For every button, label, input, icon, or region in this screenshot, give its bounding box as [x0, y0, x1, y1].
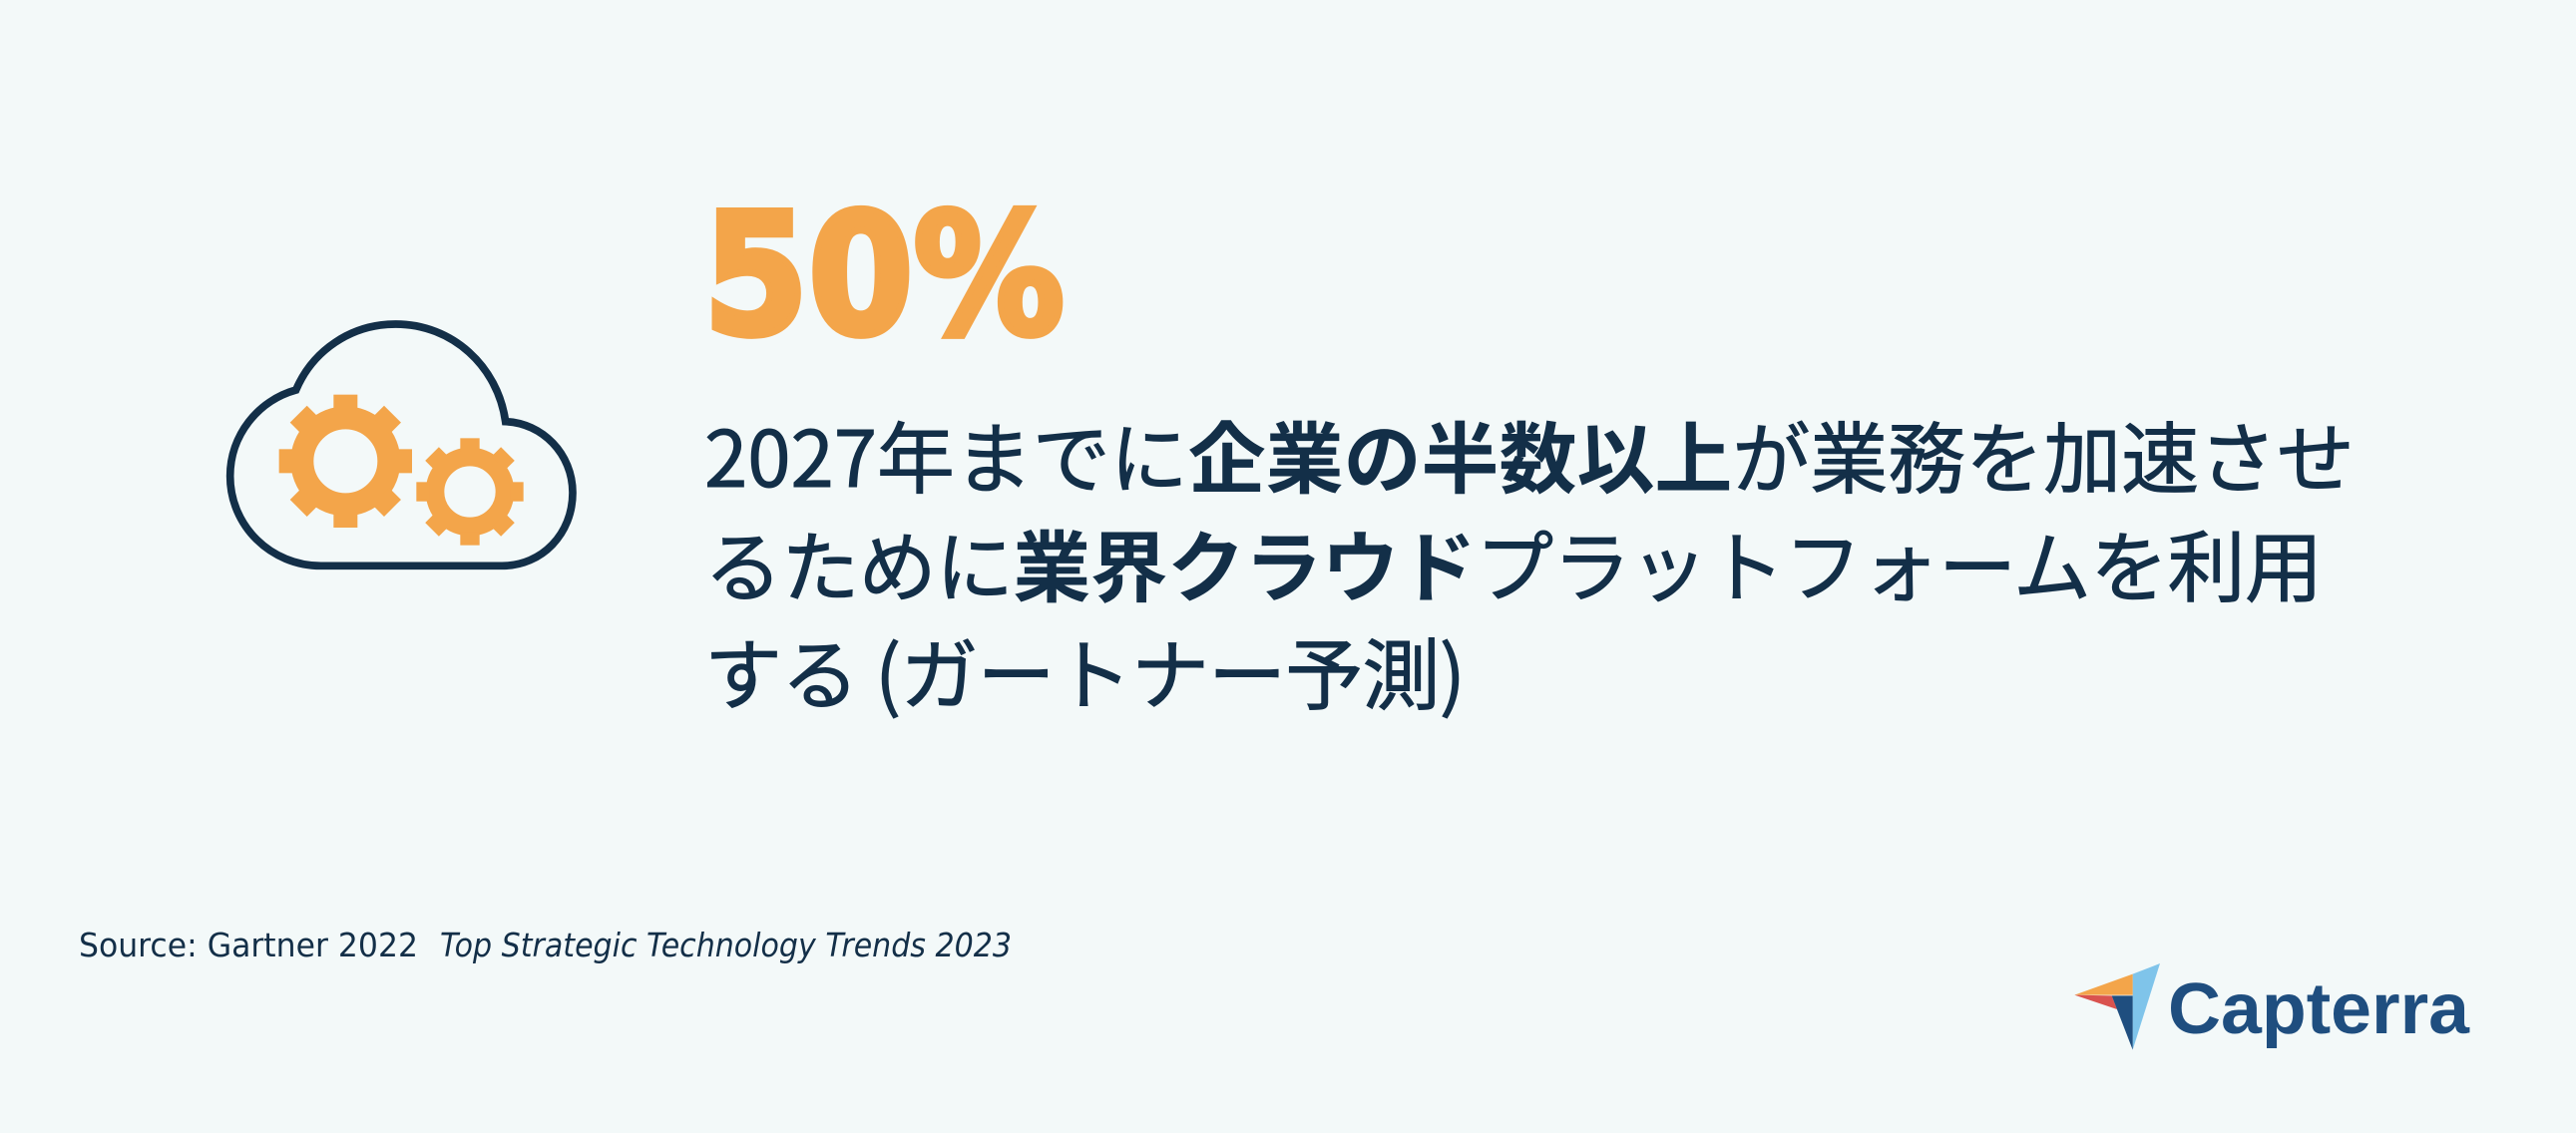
text block: main statement [704, 398, 2355, 726]
icon: cloud with gears [230, 324, 573, 566]
heading: 50%: 50% [703, 178, 1065, 373]
source label: Source: Gartner 2022 [79, 926, 418, 964]
icon: large gear [279, 395, 412, 528]
icon: cloud outline [230, 324, 573, 566]
line 2: るために業界クラウドプラットフォームを利用 [704, 507, 2323, 618]
source title: Top Strategic Technology Trends 2023 [440, 926, 1012, 964]
logo: Capterra [2074, 963, 2470, 1050]
logo mark [2074, 963, 2160, 1050]
source note [79, 926, 1012, 964]
line 3: する (ガートナー予測) [704, 614, 1466, 726]
line 1: 2027年までに企業の半数以上が業務を加速させ [704, 398, 2355, 510]
logo wordmark: Capterra [2168, 969, 2470, 1049]
icon: small gear [416, 438, 524, 546]
